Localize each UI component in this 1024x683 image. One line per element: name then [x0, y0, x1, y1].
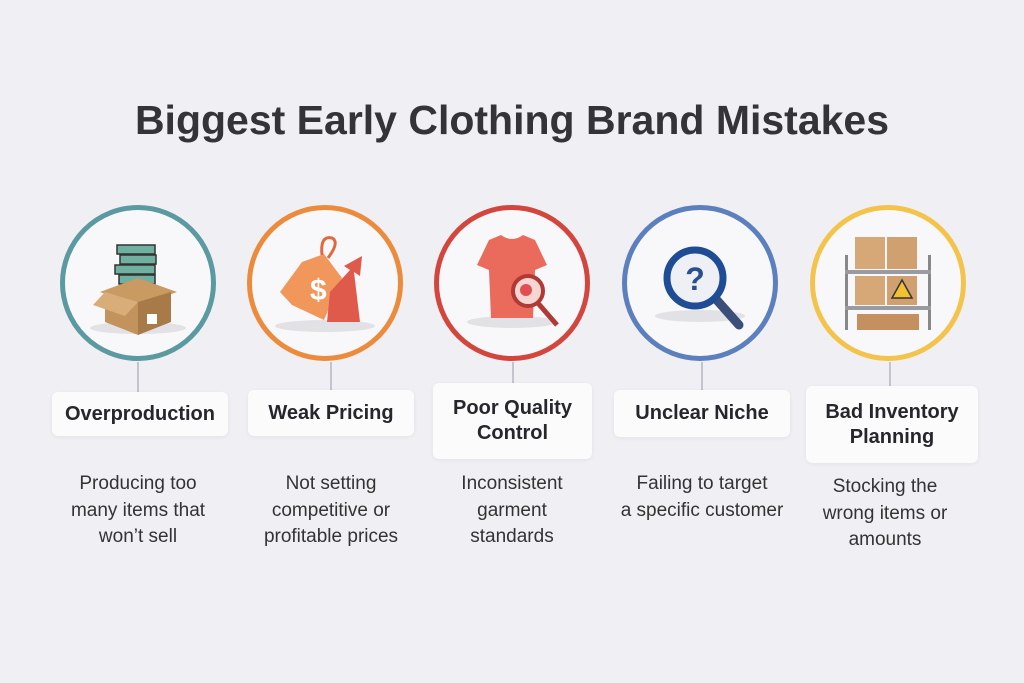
panel: unclear niche: Unclear Niche — [635, 402, 769, 424]
text: weak pricing description: profitable prices — [264, 526, 398, 547]
panel: bad inventory planning — [806, 386, 978, 463]
panel: unclear niche — [614, 390, 790, 437]
icon: question magnifier — [622, 205, 778, 361]
text: inventory description: wrong items or — [823, 502, 947, 524]
panel: weak pricing — [248, 390, 414, 436]
text: inventory description: amounts — [849, 529, 921, 550]
panel: poor quality control: Control — [477, 422, 548, 444]
icon: weak pricing tag — [247, 205, 403, 361]
title: Biggest Early Clothing Brand Mistakes — [135, 97, 889, 143]
text: quality description — [461, 473, 563, 547]
text: quality description: standards — [470, 526, 554, 547]
text: weak pricing description — [264, 473, 398, 547]
panel: poor quality control: Poor Quality — [453, 397, 572, 419]
text: inventory description — [822, 476, 947, 550]
panel: bad inventory planning: Bad Inventory — [825, 400, 959, 422]
panel: overproduction: Overproduction — [65, 402, 215, 424]
text: weak pricing description: Not setting — [286, 473, 376, 494]
text: quality description: garment — [477, 500, 547, 520]
text: overproduction description: many items that — [71, 500, 205, 520]
panel: bad inventory planning: Planning — [850, 426, 934, 448]
text: inventory description: Stocking the — [833, 476, 937, 497]
panel: poor quality control — [433, 383, 592, 459]
icon: tshirt magnifier — [434, 205, 590, 361]
icon: question magnifier: ? — [685, 261, 705, 297]
text: overproduction description: Producing too — [79, 473, 197, 494]
icon: weak pricing tag: $ — [310, 274, 327, 307]
text: overproduction description — [71, 473, 205, 547]
text: niche description — [621, 473, 783, 520]
icon: inventory shelf — [810, 205, 966, 361]
text: niche description: Failing to target — [637, 473, 767, 494]
text: niche description: a specific customer — [621, 500, 783, 520]
text: weak pricing description: competitive or — [272, 500, 390, 520]
text: quality description: Inconsistent — [461, 473, 563, 494]
icon: overproduction box — [60, 205, 216, 361]
text: overproduction description: won’t sell — [99, 526, 177, 547]
panel: overproduction — [52, 392, 228, 436]
panel: weak pricing: Weak Pricing — [268, 402, 394, 424]
